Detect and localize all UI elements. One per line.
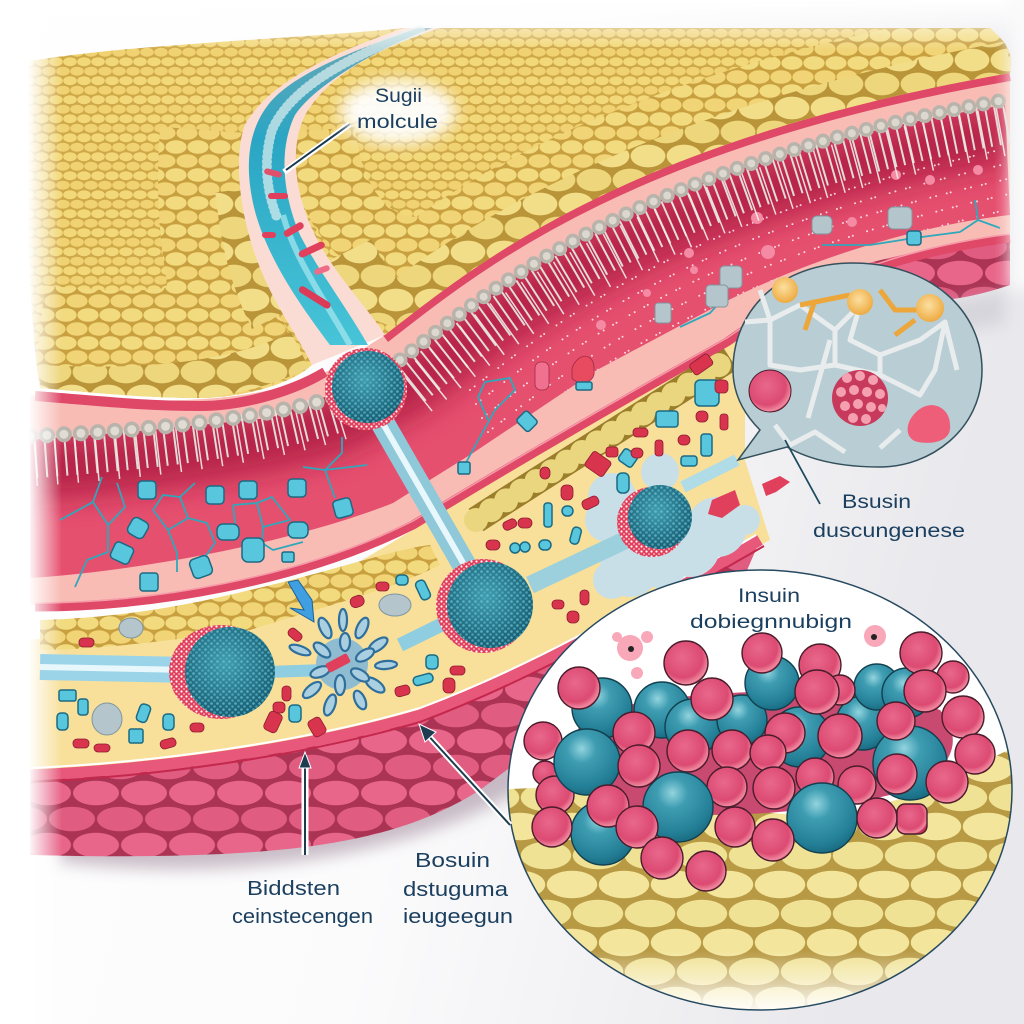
sphere: left [169,625,275,719]
hexagon lattice [745,290,957,452]
sphere: middle [436,559,533,653]
cluster filler behind spheres [572,691,953,815]
panel: transport beams [40,415,737,672]
red cell band far right [800,238,1010,320]
panel: right yellow tissue lobe [280,20,1020,350]
text: bubble label: Bsusin [842,492,911,513]
strip cells [476,358,730,520]
back pink spheres [524,632,995,814]
callout line: sugar molecule [284,124,350,172]
panel: cloud around lower-right sphere [585,453,760,599]
panel: pale tissue layer [30,73,1010,607]
text: bottom middle label: ieugeegun [403,906,513,928]
arrow: bottom diagonal [419,724,510,825]
panel: blue network and cubes [60,200,1000,591]
front pink spheres [532,745,927,891]
panel: red tissue layer [30,105,1024,578]
sphere: right in cloud [617,485,692,557]
icon: blue down arrow [288,580,314,622]
text: bubble label: duscungenese [813,521,965,542]
panel: molecule speech bubble [733,263,982,467]
orange bonds [800,290,925,335]
pink droplets [596,165,983,330]
panel: upper yellow lobe rims [35,76,1010,406]
panel: insulin inset lens [500,570,1020,1024]
panel: left yellow tissue lobe [30,28,404,398]
text: sugar molecule label: Sugii [375,86,422,107]
text: bottom left label: Biddsten [247,878,340,900]
cell bed [508,750,1012,1009]
lower lining [35,238,1010,607]
arrow: bottom vertical [299,752,311,855]
pink free fragments [612,625,886,679]
text: bottom middle label: dstuguma [403,879,509,901]
panel: villi rows [30,100,1015,463]
panel: yellow cell strip [40,358,730,650]
small red protein near callout [762,476,790,496]
text: bottom left label: ceinstecengen [232,906,373,928]
right villi [412,122,1012,385]
icon: branched receptor cluster [288,609,397,717]
membrane rim [30,540,760,775]
raspberry cluster [832,370,888,426]
panel: channel with sugar molecules [239,28,440,365]
panel: yellow plasma channel [30,340,770,782]
pink protein blobs [535,362,549,390]
pink blob [908,405,950,443]
red core [325,653,351,673]
text: inset label: Insuin [738,586,800,607]
dark crimson shading [30,135,1024,474]
panel: lower red tissue band [30,540,760,869]
text: inset label: dobiegnnubign [690,612,852,633]
text: bottom middle label: Bosuin [415,850,490,872]
left villi [35,412,340,458]
pink atom [749,370,791,412]
orange atoms [772,277,798,303]
callout line: bubble [785,440,820,504]
label glow: sugar molecule [340,80,456,144]
white speckles [469,150,1008,433]
red protein by cloud [708,490,740,518]
red sugar molecules [282,221,305,238]
front teal spheres [554,729,857,865]
panel: scattered particles in plasma [57,353,790,752]
text: sugar molecule label: molcule [357,112,438,133]
sphere: top [325,348,407,430]
far right shadow [900,290,1005,340]
back teal spheres [572,656,947,800]
